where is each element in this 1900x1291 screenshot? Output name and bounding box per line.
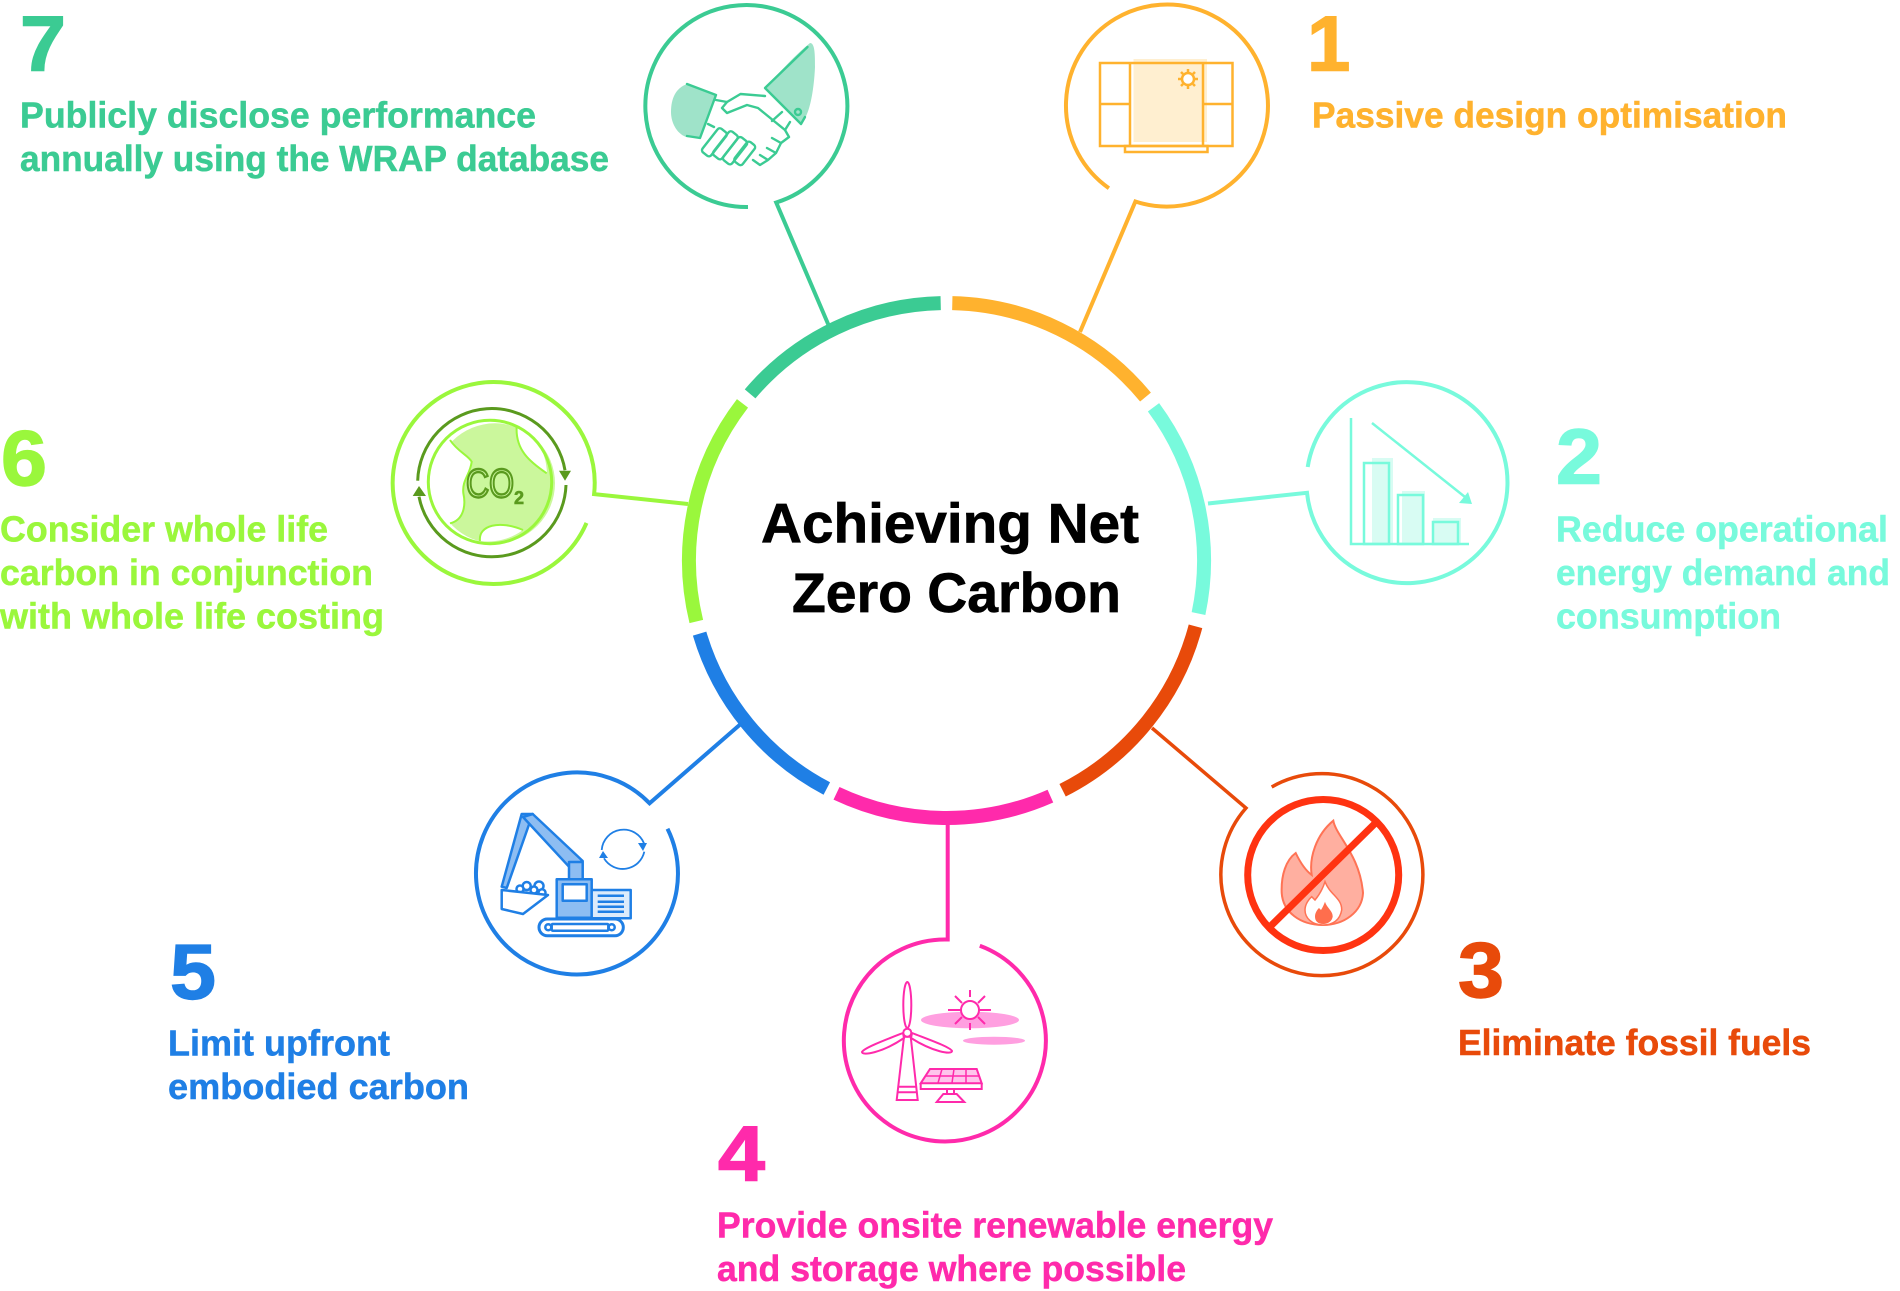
ring segment 6 (689, 403, 742, 622)
label 7: Publicly disclose performance (20, 94, 536, 136)
icon: crossed-out flame (1248, 800, 1399, 950)
label 4: and storage where possible (717, 1248, 1186, 1289)
label 2 (1556, 508, 1890, 636)
label 4: Provide onsite renewable energy (717, 1204, 1273, 1246)
label 2: energy demand and (1556, 552, 1890, 593)
ring segment 5 (700, 634, 827, 788)
number 3: 3 (1458, 926, 1504, 1014)
label 6 (0, 508, 384, 636)
step 3: fossil fuels (1152, 728, 1811, 1063)
callout circle and connector 6 (393, 382, 688, 584)
number 5: 5 (170, 928, 216, 1016)
step 7: public disclosure (20, 0, 847, 325)
number 7: 7 (20, 0, 66, 88)
central ring (689, 303, 1204, 818)
callout circle and connector 5 (476, 724, 741, 974)
number 2: 2 (1556, 412, 1602, 500)
icon: handshake (671, 43, 815, 166)
number 1: 1 (1307, 0, 1350, 88)
number 4: 4 (718, 1110, 765, 1198)
icon: CO2 globe with cycle arrows: 2 (514, 488, 524, 508)
label 6: carbon in conjunction (0, 552, 373, 593)
icon: window with sun (1100, 59, 1232, 152)
title (761, 492, 1139, 624)
ring segment 7 (750, 303, 941, 394)
label 5 (168, 1022, 469, 1107)
label 2: consumption (1556, 595, 1781, 636)
label 5: Limit upfront (168, 1022, 390, 1064)
callout circle and connector 1 (1066, 5, 1268, 332)
label 7: annually using the WRAP database (20, 138, 609, 179)
label 6: Consider whole life (0, 508, 328, 550)
step 5: embodied carbon (168, 724, 741, 1107)
step 1: passive design (1066, 0, 1787, 332)
ring segment 2 (1154, 407, 1204, 614)
title: Zero Carbon (792, 561, 1121, 624)
step 2: operational energy (1208, 382, 1890, 636)
label 2: Reduce operational (1556, 508, 1888, 550)
callout circle and connector 7 (645, 5, 847, 325)
callout circle and connector 2 (1208, 382, 1507, 583)
step 4: renewable energy (717, 823, 1273, 1289)
callout circle and connector 4 (844, 823, 1046, 1141)
label 3: Eliminate fossil fuels (1458, 1022, 1811, 1063)
label 5: embodied carbon (168, 1066, 469, 1107)
label 7 (20, 94, 609, 179)
step 6: whole life carbon (0, 382, 688, 636)
title: Achieving Net (761, 492, 1139, 554)
icon: CO2 globe with cycle arrows: CO (466, 462, 514, 506)
icon: CO2 globe with cycle arrows (413, 409, 571, 557)
number 6: 6 (1, 414, 47, 502)
ring segment 4 (836, 793, 1050, 818)
icon: excavator with recycling arrows (502, 814, 647, 936)
label 4 (717, 1204, 1273, 1289)
callout circle and connector 3 (1152, 728, 1423, 976)
icon: falling bar chart (1351, 418, 1472, 544)
ring segment 1 (952, 303, 1146, 397)
icon: wind turbine, sun and solar panel (862, 982, 1025, 1102)
ring segment 3 (1063, 626, 1196, 790)
label 1: Passive design optimisation (1312, 94, 1787, 135)
label 6: with whole life costing (0, 595, 384, 636)
